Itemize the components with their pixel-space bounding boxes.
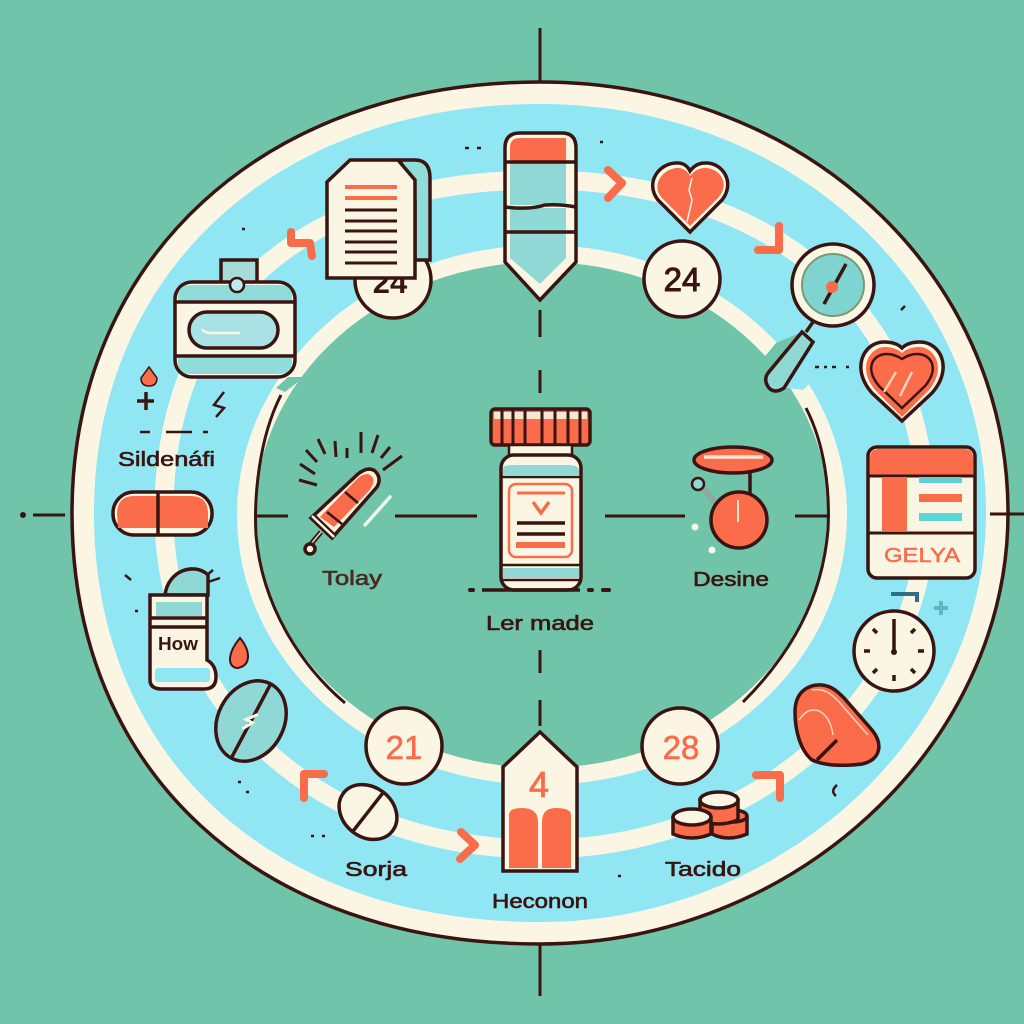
icon: lens tablet bbox=[202, 668, 300, 774]
inner cream ring and centre bbox=[237, 245, 847, 785]
icon: document with day circle bbox=[327, 160, 431, 318]
icon: coral stone bbox=[795, 685, 879, 765]
middle cream path bbox=[164, 180, 926, 849]
icon: capsule bbox=[113, 492, 212, 535]
label: Desine: Desine bbox=[693, 569, 769, 591]
label: Tacido: Tacido bbox=[665, 859, 741, 881]
icon: how bottle bbox=[150, 569, 220, 689]
label: Tolay: Tolay bbox=[322, 568, 382, 590]
label: Ler made: Ler made bbox=[486, 613, 594, 635]
icon: clock bbox=[854, 611, 934, 691]
label: Sildenafi: Sildenáfi bbox=[118, 449, 215, 471]
icon: circle 24 bbox=[644, 241, 720, 317]
icon: circle 21 bbox=[366, 708, 442, 784]
label: Heconon: Heconon bbox=[492, 891, 588, 913]
arrow: top bbox=[608, 170, 622, 198]
arrow: lower right bbox=[756, 775, 780, 798]
icon: top vial bbox=[505, 133, 576, 300]
icon: stacked tablets bbox=[673, 792, 747, 838]
arrow: upper right bbox=[758, 226, 779, 250]
icon: thermometer bbox=[299, 432, 402, 554]
number 4: 4 bbox=[529, 764, 549, 805]
label: Sorja: Sorja bbox=[345, 859, 408, 881]
number 24: 24 bbox=[664, 261, 700, 298]
number 28: 28 bbox=[663, 729, 699, 766]
icon: drop bbox=[141, 367, 157, 386]
arrow: lower left bbox=[304, 774, 324, 798]
icon: house dose marker bbox=[503, 732, 577, 871]
decorative small marks bbox=[125, 142, 948, 876]
arrow: upper left bbox=[291, 232, 312, 256]
icon: circle 28 bbox=[642, 708, 718, 784]
arrow: bottom bbox=[460, 832, 475, 859]
icon: disc and ball bbox=[692, 447, 772, 554]
outer ring band bbox=[72, 82, 1008, 944]
centre bottle bbox=[470, 409, 609, 590]
icon: scored tablet bbox=[328, 773, 408, 851]
number 21: 21 bbox=[386, 729, 422, 766]
icon: magnifier gauge bbox=[766, 244, 874, 391]
bottle label: How bbox=[158, 634, 199, 654]
icon: heart top bbox=[653, 163, 728, 232]
icon: case bbox=[175, 260, 295, 377]
day label: 24 bbox=[373, 265, 408, 300]
icon: heart gem bbox=[861, 342, 943, 421]
icon: info card bbox=[868, 447, 975, 578]
card label: GELYA bbox=[884, 545, 961, 567]
